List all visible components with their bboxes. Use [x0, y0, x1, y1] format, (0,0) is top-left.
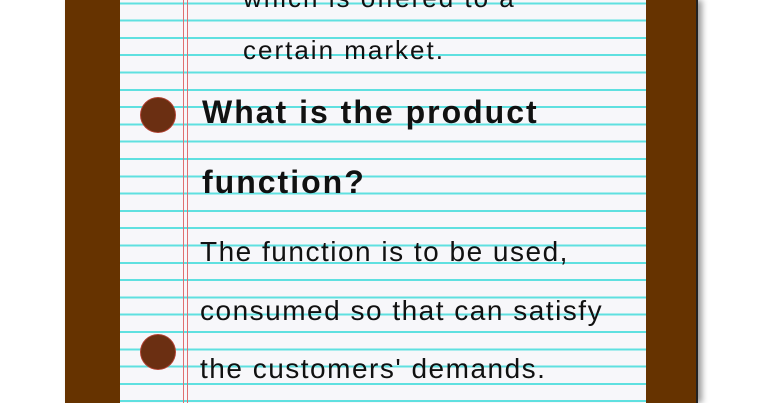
heading line 2: function? — [202, 164, 366, 200]
heading: product function question: What is the product — [202, 94, 539, 130]
body text answer — [200, 236, 603, 384]
body text answer: the customers' demands. — [200, 353, 546, 384]
text: certain market: certain market. — [243, 35, 445, 65]
paper sheet — [120, 0, 646, 403]
hole punch 2 — [141, 335, 175, 369]
hole punch 1 — [141, 98, 175, 132]
body text answer: The function is to be used, — [200, 236, 569, 267]
margin lines — [183, 0, 184, 403]
body text answer: consumed so that can satisfy — [200, 294, 603, 326]
